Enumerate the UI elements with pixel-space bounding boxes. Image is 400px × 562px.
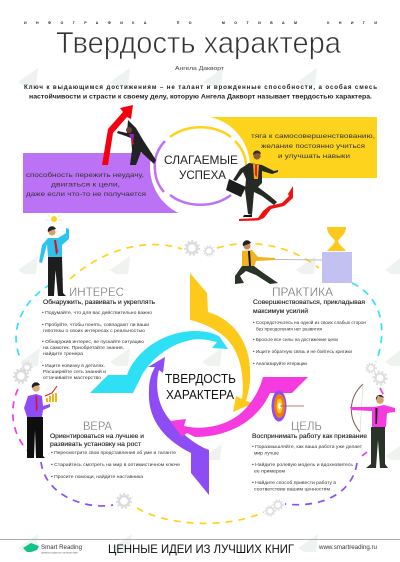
tips: на самотек. Приобретайте знания, <box>43 344 124 350</box>
yellow panel text: тяга к самосовершенствованию, <box>251 133 375 140</box>
tips: соответствие вашим ценностям <box>254 486 330 492</box>
title: Твердость характера <box>56 25 342 60</box>
subheading: Ориентироваться на лучшее и <box>50 433 144 440</box>
purple panel <box>23 153 197 213</box>
tips: мир лучше <box>254 450 279 456</box>
panel: components of success <box>23 116 377 218</box>
arrow: purple <box>148 357 209 495</box>
tips: • Просите помощи, найдите наставника <box>51 473 143 479</box>
tips: Расширяйте сеть знаний и <box>43 368 106 374</box>
tips: • Поразмышляйте, как ваша работа уже делает <box>252 443 363 449</box>
icon: man pulling rope <box>235 240 322 284</box>
centre title <box>165 372 236 402</box>
intro text: Ключ к выдающимся достижениям – не талант и врожденные способности, а особая смесь <box>24 84 377 91</box>
heading: ВЕРА <box>83 421 112 433</box>
dashed route: yellow top <box>70 244 319 279</box>
subheading <box>253 299 366 315</box>
yellow panel <box>195 117 377 178</box>
icon: man pushing red arrow <box>102 105 156 165</box>
tips: ее примером <box>254 468 285 474</box>
arrow: yellow <box>190 273 254 412</box>
tips <box>252 443 363 492</box>
intro text <box>24 84 377 100</box>
icon: target with arrow <box>272 390 304 422</box>
tips: • Пересмотрите свои представления об уме и таланте <box>51 450 176 455</box>
yellow panel text <box>251 133 375 160</box>
arrow: cyan <box>90 331 228 393</box>
purple panel text <box>26 171 147 198</box>
panel: components of success: УСПЕХА <box>179 168 226 182</box>
dashed route: magenta <box>13 388 384 456</box>
tips: гипотезы о своих интересах с реальностью <box>43 328 146 333</box>
tips: найдите тренера <box>43 350 83 356</box>
footer <box>0 539 400 556</box>
icon: man with lightbulb <box>39 215 69 296</box>
icons: gears <box>14 241 386 516</box>
header label: ИНФОГРАФИКА ПО МОТИВАМ КНИГИ <box>24 21 377 25</box>
tips <box>253 319 366 366</box>
tips <box>51 450 180 479</box>
centre heading: СЛАГАЕМЫЕ <box>164 153 238 167</box>
tips: • Старайтесь смотреть на мир в оптимистичном ключе <box>51 461 180 467</box>
tips: • Сосредоточьтесь на одной из своих слабых сторон <box>253 319 366 325</box>
footer slogan: ЦЕННЫЕ ИДЕИ ИЗ ЛУЧШИХ КНИГ <box>108 542 294 556</box>
subheading: развивать установку на рост <box>50 441 141 448</box>
subheading: Воспринимать работу как призвание <box>252 432 367 440</box>
subheading: Обнаружить, развивать и укреплять <box>43 298 156 306</box>
brand name: Smart Reading <box>41 545 82 551</box>
dashed route: cyan <box>16 279 382 362</box>
subheading: Совершенствоваться, прикладывая <box>253 299 366 306</box>
heading: ИНТЕРЕС <box>69 287 124 299</box>
brand tagline: ценные идеи из лучших книг <box>41 552 78 554</box>
icon: trophy on block <box>322 227 352 283</box>
centre circle <box>150 116 250 218</box>
tips: • Бросьте все силы на достижение цели <box>253 337 338 342</box>
centre title: ТВЕРДОСТЬ <box>165 372 236 386</box>
icon: man with briefcase walking up <box>226 150 293 221</box>
intro text: настойчивости и страсти к своему делу, которую Ангела Дакворт называет твердостью характера. <box>29 94 372 100</box>
icon: man with growth chart <box>24 382 57 458</box>
tips <box>42 309 152 380</box>
dashed route: yellow bottom <box>137 508 264 523</box>
tips: • Подумайте, что для вас действительно важно <box>42 309 152 315</box>
tips: • Анализируйте итерации <box>253 360 307 366</box>
icon: archer <box>350 384 395 468</box>
dashed route: purple <box>41 462 357 506</box>
panel: practice <box>235 227 366 366</box>
icon: logo <box>23 543 39 552</box>
centre title: ХАРАКТЕРА <box>166 388 235 402</box>
panel: interest <box>39 215 156 380</box>
panel: purpose <box>252 384 395 492</box>
arrow: magenta <box>170 377 308 437</box>
purple panel text: даже если что-то не получается <box>26 191 147 198</box>
yellow panel text: желание постоянно учиться <box>261 143 366 150</box>
tips: • Ищите новизну в деталях. <box>42 363 105 368</box>
yellow panel text: и улучшать навыки <box>278 153 350 160</box>
tips: • Найдите способ привести работу в <box>252 479 337 485</box>
tips: • Найдите ролевую модель и вдохновитесь <box>252 461 354 467</box>
subheading <box>50 433 144 448</box>
heading: ПРАКТИКА <box>272 287 333 299</box>
tips: • Обнаружив интерес, не пускайте ситуацию <box>42 338 145 344</box>
purple panel text: двигаться к цели, <box>51 182 120 188</box>
tips: без преодоления нет развития <box>256 326 323 332</box>
purple panel text: способность пережить неудачу, <box>26 171 144 179</box>
author: Ангела Дакворт <box>175 66 225 72</box>
tips: оттачивайте мастерство <box>43 374 101 380</box>
tips: • Пробуйте, чтобы понять, совпадают ли ваши <box>42 321 149 327</box>
heading: ЦЕЛЬ <box>291 421 322 433</box>
subheading: максимум усилий <box>253 307 308 315</box>
website: www.smartreading.ru <box>318 545 377 551</box>
panel: faith <box>24 382 180 479</box>
tips: • Ищите обратную связь и не бойтесь критики <box>253 348 352 354</box>
